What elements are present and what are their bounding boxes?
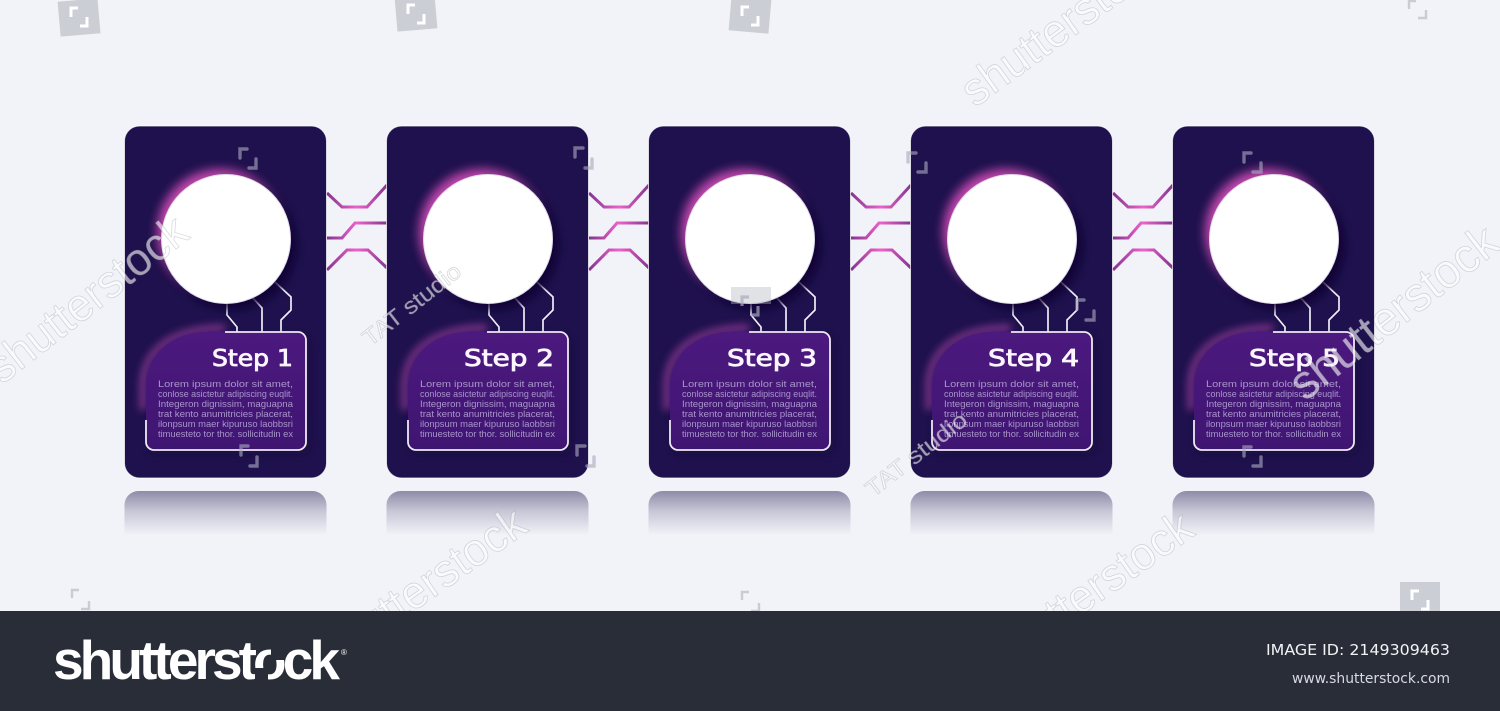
paragraph: Integeron dignissim, maguapna [944,398,1080,409]
heading: Step 2 [464,346,554,372]
watermark mark [1244,153,1261,172]
logo cut-outs [255,648,285,682]
paragraph: trat kento anumitricies placerat, [682,408,817,419]
watermark mark [577,446,594,466]
card background [386,126,588,478]
circuit lines [751,282,815,334]
card background [648,126,850,478]
paragraph: Lorem ipsum dolor sit amet, [1206,378,1341,389]
card background [1172,126,1374,478]
connector group 4 [1113,185,1173,270]
panel: step 2 [386,126,588,535]
paragraph: Integeron dignissim, maguapna [420,398,556,409]
panel: step 3 [648,126,850,535]
registered mark: ® [341,648,347,657]
watermark tile [729,0,771,34]
panel: step 5 [1172,126,1374,535]
paragraph: conlose asictetur adipiscing euqlit. [682,388,817,399]
watermark text: TAT studio [860,406,972,502]
heading: Step 5 [1249,346,1340,372]
paragraph: conlose asictetur adipiscing euqlit. [1206,388,1341,399]
paragraph [420,378,556,439]
paragraph [682,378,818,439]
watermark tile [731,287,771,315]
paragraph: ilonpsum maer kipuruso laobbsri [944,418,1079,429]
paragraph: conlose asictetur adipiscing euqlit. [420,388,555,399]
paragraph [158,378,294,439]
shutterstock logo: shutterstock [53,629,340,691]
paragraph: timuesteto tor thor. sollicitudin ex [420,428,555,439]
circuit lines [1275,282,1339,334]
image circle [1205,169,1345,310]
circuit lines [489,282,553,334]
heading: Step 1 [212,346,293,372]
watermark mark [908,153,926,172]
watermark mark [240,149,256,168]
text panel [929,328,1095,454]
watermark mark [72,590,89,609]
card reflection [386,491,588,535]
text panel [1191,328,1357,454]
watermark tile [1400,582,1440,612]
paragraph: timuesteto tor thor. sollicitudin ex [1206,428,1341,439]
watermark text: TAT studio [357,258,466,351]
paragraph: timuesteto tor thor. sollicitudin ex [158,428,293,439]
panel: step 4 [910,126,1112,535]
paragraph: Lorem ipsum dolor sit amet, [420,378,555,389]
watermark mark [1409,1,1426,18]
watermark tile [58,0,100,37]
paragraph: Integeron dignissim, maguapna [158,398,294,409]
watermark text: shutterstock [309,495,536,676]
paragraph: Lorem ipsum dolor sit amet, [944,378,1079,389]
card reflection [648,491,850,535]
paragraph: Integeron dignissim, maguapna [682,398,818,409]
footer bar [0,611,1500,711]
watermark text: shutterstock [976,499,1203,680]
paragraph: trat kento anumitricies placerat, [944,408,1079,419]
paragraph: timuesteto tor thor. sollicitudin ex [944,428,1079,439]
circuit lines [1013,282,1077,334]
connector group 3 [851,185,911,270]
heading: Step 4 [988,346,1079,372]
paragraph: Lorem ipsum dolor sit amet, [158,378,293,389]
card reflection [1172,491,1374,535]
paragraph: conlose asictetur adipiscing euqlit. [944,388,1079,399]
image circle [943,169,1083,310]
panel: step 1 [124,126,326,535]
text panel [667,328,833,454]
text panel [143,328,309,454]
watermark mark [1244,447,1261,466]
connector group 2 [589,185,649,270]
text panel [405,328,571,454]
heading: Step 3 [727,346,817,372]
paragraph: trat kento anumitricies placerat, [158,408,293,419]
paragraph: ilonpsum maer kipuruso laobbsri [158,418,293,429]
paragraph: conlose asictetur adipiscing euqlit. [158,388,293,399]
paragraph [944,378,1080,439]
image circle [157,169,297,310]
paragraph: ilonpsum maer kipuruso laobbsri [1206,418,1341,429]
card background [910,126,1112,478]
paragraph [1206,378,1342,439]
paragraph: timuesteto tor thor. sollicitudin ex [682,428,817,439]
connector group 1 [327,185,387,270]
paragraph: ilonpsum maer kipuruso laobbsri [420,418,555,429]
image id: IMAGE ID: 2149309463 [1266,641,1450,659]
watermark mark [742,592,759,611]
card background [124,126,326,478]
website: www.shutterstock.com [1292,671,1450,687]
paragraph: ilonpsum maer kipuruso laobbsri [682,418,817,429]
watermark mark [575,148,592,168]
image circle [419,169,559,310]
paragraph: trat kento anumitricies placerat, [420,408,555,419]
circuit lines [227,282,291,334]
card reflection [910,491,1112,535]
watermark tile [395,0,437,32]
paragraph: trat kento anumitricies placerat, [1206,408,1341,419]
image circle [681,169,821,310]
paragraph: Integeron dignissim, maguapna [1206,398,1342,409]
card reflection [124,491,326,535]
watermark mark [241,446,257,466]
paragraph: Lorem ipsum dolor sit amet, [682,378,817,389]
watermark mark [1077,300,1094,320]
